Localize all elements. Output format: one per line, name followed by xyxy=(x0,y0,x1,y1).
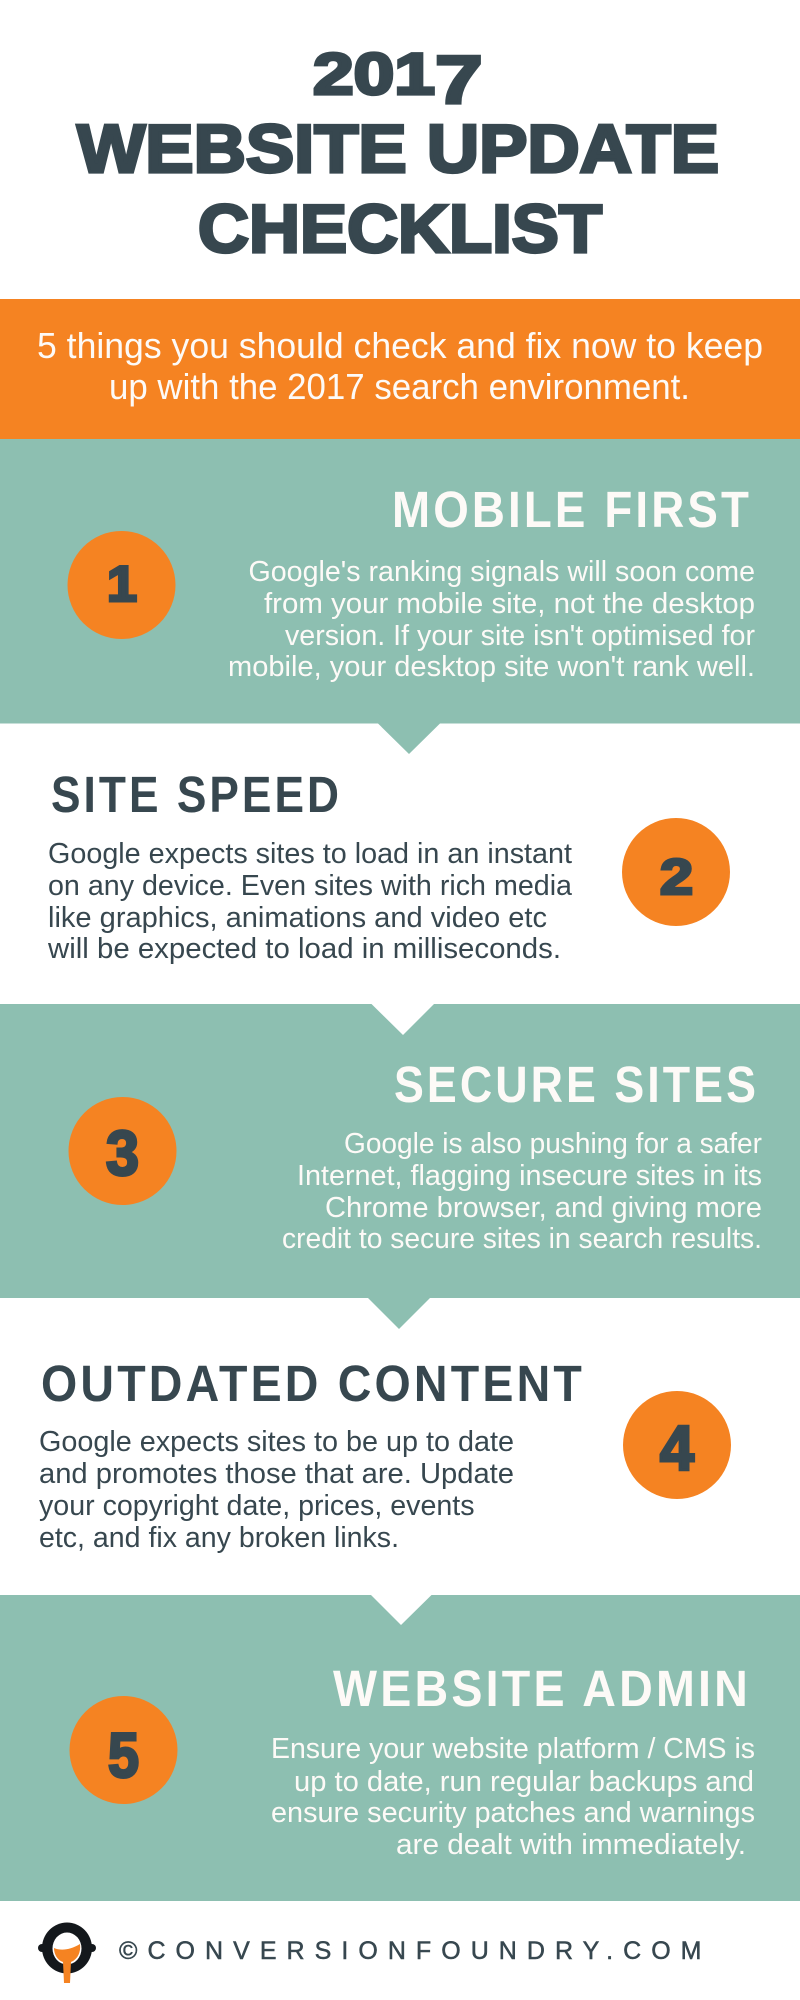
panel: step 5 website admin xyxy=(0,1595,800,1901)
footer website credit: ©CONVERSIONFOUNDRY.COM xyxy=(119,1937,701,1965)
body text: secure sites: Internet, flagging insecure sites in its xyxy=(297,1160,762,1192)
number badge 3: 3 xyxy=(106,1119,139,1189)
body text: website admin: ensure security patches and warnings xyxy=(271,1797,755,1829)
body text: mobile first: mobile, your desktop site won't rank well. xyxy=(228,651,755,683)
number badge 2 xyxy=(622,818,730,926)
number badge 3 xyxy=(68,1097,176,1205)
panel: subtitle band xyxy=(0,299,800,439)
title: CHECKLIST xyxy=(198,191,602,267)
panel: step 1 mobile first xyxy=(0,439,800,754)
number badge 4 xyxy=(623,1391,731,1499)
body text: secure sites: credit to secure sites in search results. xyxy=(282,1223,762,1255)
panel: step 2 site speed xyxy=(47,766,730,965)
number badge 5: 5 xyxy=(108,1721,139,1791)
body text: mobile first xyxy=(228,556,755,683)
body text: website admin: are dealt with immediately. xyxy=(396,1829,746,1861)
body text: mobile first: Google's ranking signals will soon come xyxy=(248,556,755,588)
body text: mobile first: from your mobile site, not the desktop xyxy=(264,588,755,620)
heading: outdated content: OUTDATED CONTENT xyxy=(41,1355,585,1412)
body text: outdated content: etc, and fix any broken links. xyxy=(39,1522,399,1554)
icon: conversion foundry logo xyxy=(38,1922,96,1983)
body text: mobile first: version. If your site isn't optimised for xyxy=(285,620,755,652)
number badge 1: 1 xyxy=(107,556,137,612)
body text: secure sites: Google is also pushing for a safer xyxy=(344,1128,763,1160)
title: 7 xyxy=(435,42,483,118)
body text: site speed: like graphics, animations and video etc xyxy=(48,902,547,934)
body text: site speed: will be expected to load in milliseconds. xyxy=(47,933,561,965)
title: WEBSITE UPDATE xyxy=(77,111,719,187)
panel: subtitle band: 5 things you should check and fix now to keep xyxy=(37,325,763,366)
body text: secure sites xyxy=(282,1128,763,1255)
body text: site speed: on any device. Even sites with rich media xyxy=(48,870,572,902)
body text: site speed xyxy=(47,838,572,965)
body text: outdated content: and promotes those that are. Update xyxy=(39,1458,514,1490)
panel: step 4 outdated content xyxy=(39,1355,731,1554)
heading: secure sites: SECURE SITES xyxy=(394,1056,759,1113)
body text: website admin: Ensure your website platform / CMS is xyxy=(271,1733,755,1765)
title xyxy=(77,41,719,267)
panel: subtitle band: up with the 2017 search environment. xyxy=(109,366,690,407)
body text: website admin xyxy=(271,1733,755,1861)
number badge 2: 2 xyxy=(660,849,693,905)
body text: outdated content xyxy=(39,1426,514,1554)
body text: secure sites: Chrome browser, and giving more xyxy=(325,1192,762,1224)
body text: website admin: up to date, run regular backups and xyxy=(294,1766,754,1798)
body text: outdated content: Google expects sites to be up to date xyxy=(39,1426,514,1458)
heading: website admin: WEBSITE ADMIN xyxy=(333,1660,751,1717)
number badge 1 xyxy=(68,531,176,639)
body text: outdated content: your copyright date, prices, events xyxy=(39,1490,474,1522)
body text: site speed: Google expects sites to load in an instant xyxy=(48,838,572,870)
heading: mobile first: MOBILE FIRST xyxy=(392,481,752,538)
panel: step 3 secure sites xyxy=(0,1004,800,1329)
number badge 4: 4 xyxy=(660,1414,694,1484)
number badge 5 xyxy=(70,1696,178,1804)
title: 201 xyxy=(313,41,435,106)
heading: site speed: SITE SPEED xyxy=(51,766,342,823)
